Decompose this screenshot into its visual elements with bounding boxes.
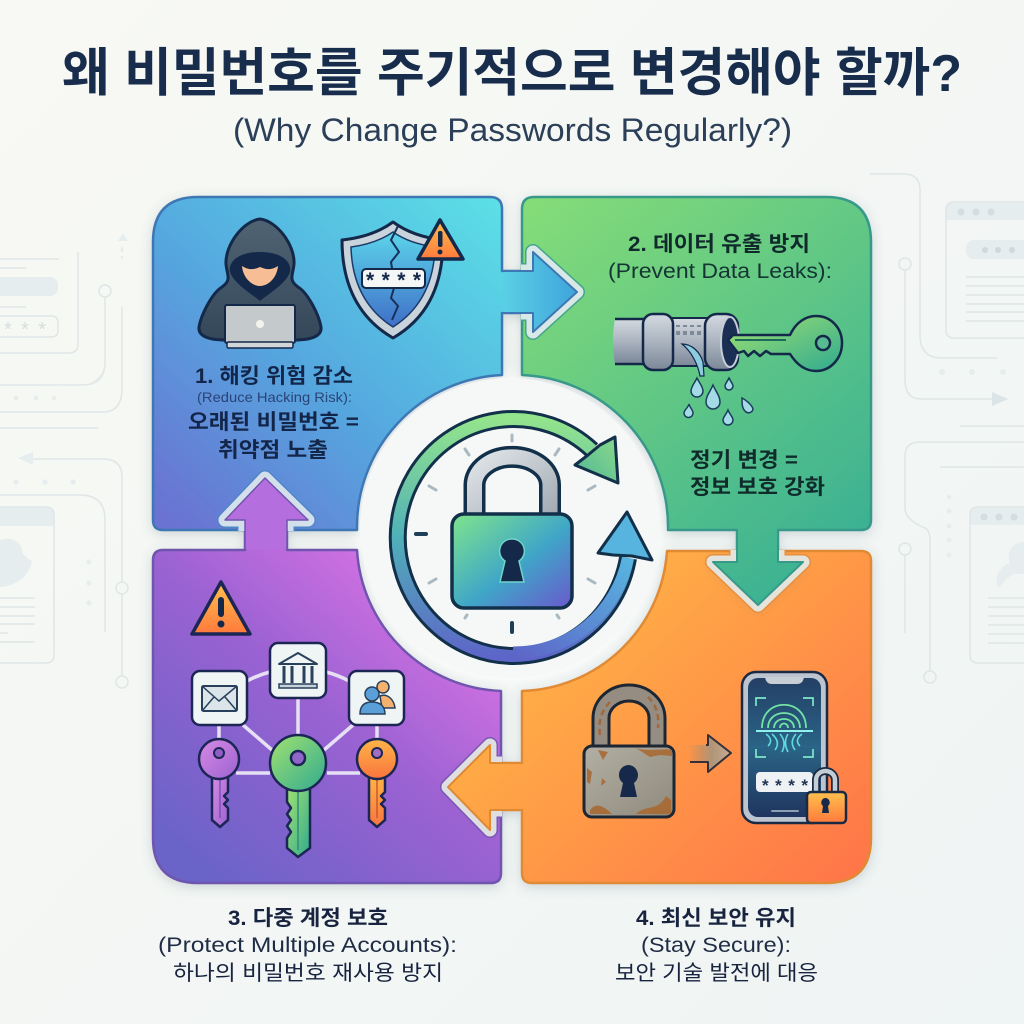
- icon: warning triangle (purple panel): [192, 582, 250, 634]
- arrow: purple to blue: [225, 478, 308, 560]
- mid section: [660, 318, 720, 366]
- text block: step 3: 3. 다중 계정 보호: [228, 907, 388, 930]
- text block: step 3: [158, 907, 457, 985]
- face shadow: [230, 252, 290, 301]
- key: orange: [357, 739, 397, 827]
- panel: blue base: [153, 197, 577, 530]
- text block: step 2 body: 정보 보호 강화: [690, 476, 825, 499]
- face: [242, 266, 278, 286]
- text block: step 2 body: [690, 449, 825, 499]
- flange right: [705, 314, 738, 370]
- icon: warning triangle (blue panel): [418, 220, 463, 259]
- connector lines: [219, 672, 377, 773]
- icon: hacker at laptop: [199, 219, 321, 348]
- flange left: [643, 314, 673, 370]
- panel: orange base: [448, 551, 871, 883]
- text block: step 4: [615, 907, 818, 985]
- lock body: [452, 514, 572, 608]
- refresh ring: [398, 419, 628, 656]
- text block: step 1: (Reduce Hacking Risk):: [197, 389, 352, 405]
- text block: step 1: [188, 365, 359, 462]
- card: people: [349, 671, 404, 725]
- text block: step 2 body: 정기 변경 =: [690, 449, 798, 472]
- key: [728, 316, 842, 371]
- clock ticks: [416, 435, 595, 632]
- arrow: blue to green: [495, 252, 577, 332]
- glow behind centre circle: [360, 378, 660, 678]
- text block: step 3: 하나의 비밀번호 재사용 방지: [173, 962, 443, 985]
- card: mail: [192, 671, 247, 725]
- green arrow head: [575, 437, 618, 483]
- arrow: green to orange: [713, 520, 803, 605]
- arrow: old lock to phone: [688, 735, 731, 772]
- centre white circle: [360, 378, 660, 678]
- background pattern: left: ***: [4, 319, 46, 341]
- keyhole: [500, 539, 524, 582]
- icon: cracked shield: [342, 222, 443, 338]
- leak: [682, 344, 704, 376]
- icon: phone with fingerprint: [742, 672, 846, 823]
- blue arrow head: [598, 512, 652, 560]
- panel: purple base: [153, 478, 501, 883]
- panel: green base: [522, 197, 871, 605]
- card: bank: [270, 643, 326, 698]
- icon: phone with fingerprint: ****: [762, 776, 808, 795]
- text block: step 4: 4. 최신 보안 유지: [636, 907, 796, 930]
- text block: step 4: 보안 기술 발전에 대응: [615, 962, 818, 985]
- drops: [684, 378, 753, 425]
- arrow: orange to purple: [448, 745, 530, 830]
- hood and body: [199, 219, 321, 340]
- text block: step 3: (Protect Multiple Accounts):: [158, 934, 457, 957]
- icon: central lock with refresh ring: [398, 419, 652, 656]
- subtitle: (Why Change Passwords Regularly?): [233, 112, 792, 148]
- background pattern: left: [0, 233, 128, 688]
- pipe: [613, 319, 720, 364]
- text block: step 2 heading: [608, 233, 832, 283]
- background pattern: right: [870, 174, 1024, 683]
- shackle: [474, 457, 550, 516]
- laptop: [225, 305, 295, 343]
- password field: [756, 772, 813, 792]
- title: 왜 비밀번호를 주기적으로 변경해야 할까?: [62, 45, 962, 103]
- text block: step 1: 오래된 비밀번호 =: [188, 411, 359, 434]
- text block: step 4: (Stay Secure):: [641, 934, 791, 957]
- fingerprint: [762, 705, 806, 728]
- text block: step 1: 1. 해킹 위험 감소: [195, 365, 353, 388]
- icon: leaking pipe with key: [613, 314, 842, 425]
- scan brackets: [756, 698, 813, 757]
- text block: step 2 heading: 2. 데이터 유출 방지: [628, 233, 810, 256]
- key: green: [270, 735, 326, 857]
- icon: rusty padlock: [584, 693, 674, 817]
- text block: step 2 heading: (Prevent Data Leaks):: [608, 260, 832, 283]
- icon: accounts network with keys: [192, 643, 404, 857]
- small padlock: [807, 771, 846, 823]
- text block: step 1: 취약점 노출: [218, 439, 328, 462]
- icon: cracked shield: ****: [366, 269, 422, 292]
- key: purple: [199, 739, 239, 827]
